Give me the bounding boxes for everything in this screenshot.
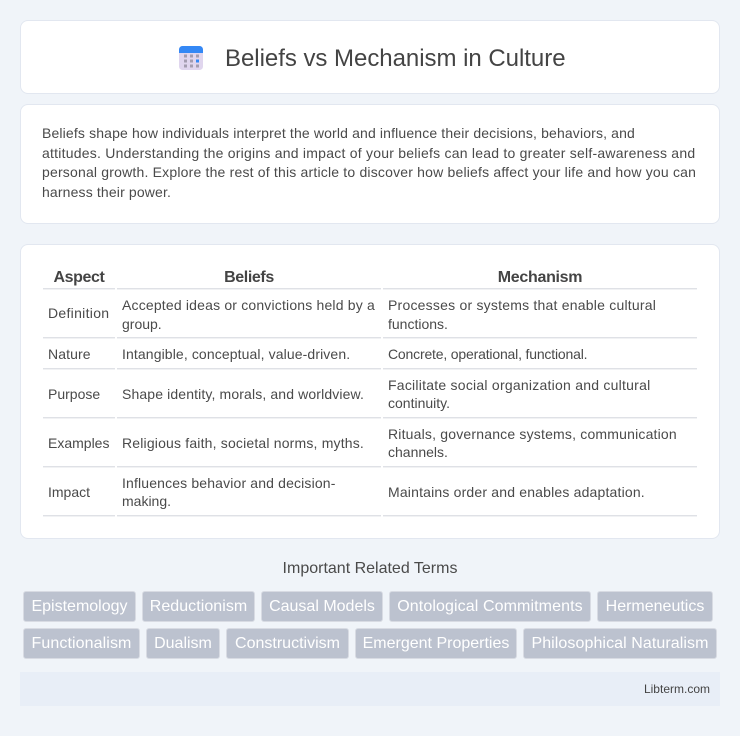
tag: Reductionism	[150, 598, 247, 615]
intro paragraph	[42, 125, 696, 200]
table header: Aspect: Aspect	[54, 269, 104, 286]
tag: Ontological Commitments	[397, 598, 583, 615]
intro paragraph: attitudes. Understanding the origins and impact of your beliefs can lead to greater self-awareness and	[42, 145, 695, 161]
comparison table panel	[20, 244, 720, 539]
row: Impact: Impact	[48, 484, 90, 500]
tag: Philosophical Naturalism	[531, 635, 709, 652]
tag	[389, 591, 591, 622]
related terms tags	[23, 591, 717, 659]
tag: Constructivism	[235, 635, 340, 652]
row: Nature: Nature	[48, 346, 91, 362]
table header: Mechanism: Mechanism	[498, 269, 582, 286]
footer credit: Libterm.com	[644, 682, 710, 696]
footer bar	[20, 672, 720, 706]
row: Examples: Religious faith, societal norms, myths.	[122, 435, 364, 451]
row: Examples: channels.	[388, 444, 448, 460]
title: Beliefs vs Mechanism in Culture	[225, 45, 566, 72]
intro text panel	[20, 104, 720, 224]
row: Examples: Rituals, governance systems, communication	[388, 426, 677, 442]
row: Purpose: Purpose	[48, 386, 100, 402]
row: Purpose: Shape identity, morals, and worldview.	[122, 386, 364, 402]
icon: calendar	[179, 46, 203, 70]
tag	[23, 591, 136, 622]
tag: Functionalism	[31, 635, 132, 652]
tag	[23, 628, 140, 659]
row: Nature	[48, 346, 587, 362]
tag: Causal Models	[269, 598, 375, 615]
row: Definition	[48, 297, 656, 332]
row: Purpose: continuity.	[388, 395, 450, 411]
row: Nature: Intangible, conceptual, value-driven.	[122, 346, 350, 362]
tag: Hermeneutics	[606, 598, 704, 615]
row: Definition: functions.	[388, 316, 448, 332]
row: Definition: Definition	[48, 305, 109, 321]
row: Impact: Maintains order and enables adaptation.	[388, 484, 645, 500]
tag	[597, 591, 713, 622]
tag	[523, 628, 717, 659]
row: Purpose: Facilitate social organization and cultural	[388, 377, 650, 393]
tag	[226, 628, 349, 659]
intro paragraph: Beliefs shape how individuals interpret the world and influence their decisions, behaviors, and	[42, 125, 635, 141]
row: Impact: making.	[122, 493, 171, 509]
tag	[355, 628, 517, 659]
tag	[146, 628, 220, 659]
table header: Beliefs: Beliefs	[224, 269, 274, 286]
tag	[261, 591, 383, 622]
tag: Emergent Properties	[363, 635, 509, 652]
related terms heading: Important Related Terms	[283, 560, 457, 577]
row: Impact	[48, 475, 645, 509]
row: Nature: Concrete, operational, functional.	[388, 346, 587, 362]
tag: Epistemology	[31, 598, 128, 615]
row: Examples	[48, 426, 677, 460]
row: Definition: group.	[122, 316, 162, 332]
row: Examples: Examples	[48, 435, 109, 451]
intro paragraph: harness their power.	[42, 184, 171, 200]
row: Definition: Processes or systems that enable cultural	[388, 297, 656, 313]
row: Impact: Influences behavior and decision-	[122, 475, 336, 491]
row: Definition: Accepted ideas or convictions held by a	[122, 297, 375, 313]
tag: Dualism	[154, 635, 212, 652]
intro paragraph: personal growth. Explore the rest of this article to discover how beliefs affect your life and how you can	[42, 164, 696, 180]
header card	[20, 20, 720, 94]
row: Purpose	[48, 377, 650, 411]
tag	[142, 591, 255, 622]
